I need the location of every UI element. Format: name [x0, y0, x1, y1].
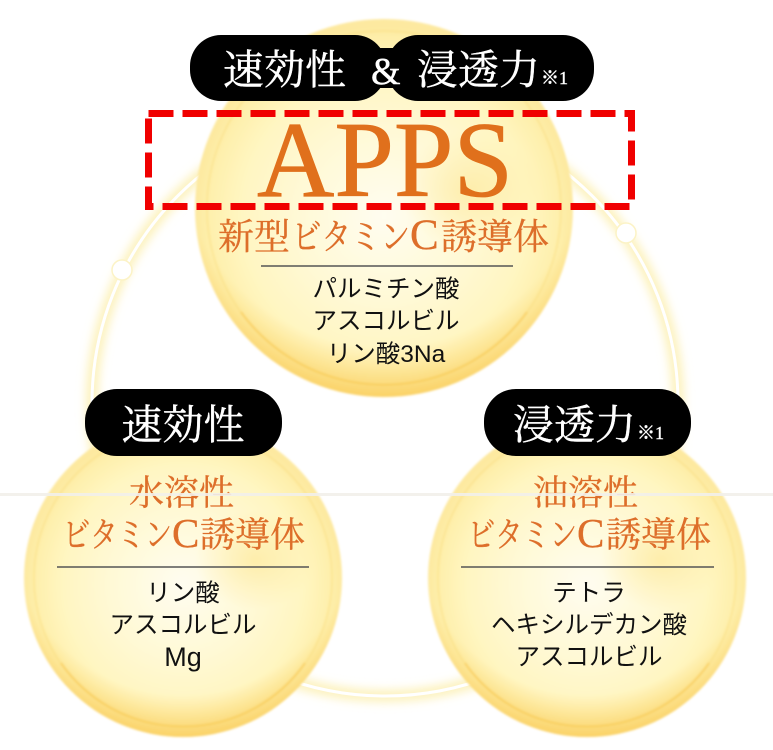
right droplet heading: 誘導体	[606, 516, 711, 555]
right ingredient text: テトラ	[552, 580, 626, 607]
right droplet heading: ビタミン	[468, 516, 577, 555]
badge: right: 浸透力※1	[513, 402, 664, 448]
left ingredient text: アスコルビル	[110, 611, 256, 639]
connecting ring	[92, 110, 678, 696]
badge: top combined	[190, 35, 594, 101]
right ingredient text: アスコルビル	[516, 643, 662, 671]
ring dot right	[616, 223, 636, 243]
left droplet heading: 水溶性	[129, 474, 234, 513]
top ingredient text: リン酸3Na	[327, 340, 446, 368]
badge: right	[484, 389, 691, 456]
droplet: right	[428, 419, 746, 737]
badge: left: 速効性	[122, 402, 244, 448]
horizontal band	[0, 493, 773, 496]
divider top	[261, 265, 513, 267]
badge text: 速効性	[223, 47, 346, 93]
top droplet heading: C	[410, 212, 439, 259]
top ingredient text: パルミチン酸	[312, 275, 460, 303]
APPS headline: APPS	[257, 101, 513, 220]
badge text right: 浸透力※1	[417, 47, 568, 93]
left droplet heading: 誘導体	[200, 516, 305, 555]
left ingredient text: Mg	[164, 642, 202, 672]
top droplet heading	[218, 212, 549, 259]
right ingredient text: ヘキシルデカン酸	[491, 611, 687, 639]
left droplet heading: C	[172, 510, 199, 556]
droplet: top	[195, 19, 573, 397]
right droplet heading: C	[577, 510, 604, 556]
ampersand: &	[371, 51, 401, 93]
badge: left	[85, 389, 282, 456]
top droplet heading: 新型	[218, 217, 290, 257]
red dashed box	[148, 114, 632, 206]
top droplet heading: 誘導体	[441, 217, 549, 257]
top ingredient text: アスコルビル	[312, 307, 460, 335]
divider right	[461, 566, 714, 568]
right droplet heading	[468, 474, 711, 556]
left ingredient text: リン酸	[146, 579, 220, 607]
left droplet heading: ビタミン	[63, 516, 172, 555]
divider left	[57, 566, 309, 568]
droplet: left	[24, 419, 342, 737]
top droplet heading: ビタミン	[292, 217, 410, 257]
ring dot left	[112, 260, 132, 280]
right droplet heading: 油溶性	[533, 474, 638, 513]
left droplet heading	[63, 474, 305, 556]
